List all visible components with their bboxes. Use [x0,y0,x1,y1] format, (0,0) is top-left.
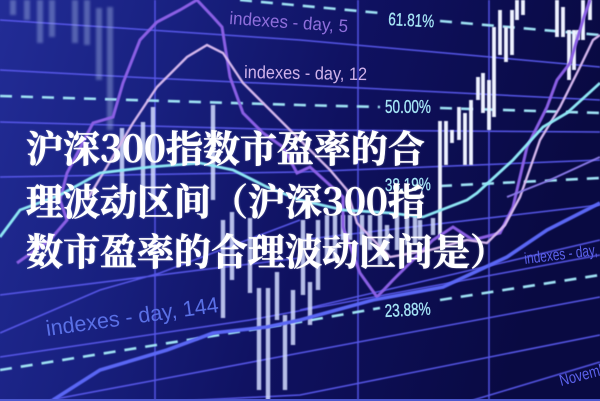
title line 1: 沪深300指数市盈率的合 [26,119,425,173]
moving average: day 12 [87,35,600,257]
moving average: cyan [0,83,600,237]
moving average: blue [53,157,600,400]
percent labels: 50.00% [385,97,431,117]
index labels: indexes - day, 12 [244,62,367,84]
index labels: indexes - day, 5 [229,8,349,36]
percent labels [384,9,435,321]
moving average: day 5 [17,0,590,297]
candlesticks, middle [122,105,433,400]
title line 2: 理波动区间（沪深300指 [26,172,425,226]
candlesticks, faded left [13,0,110,130]
index labels: indexes - day, 144 [44,292,220,341]
percent labels: 23.88% [384,299,431,321]
candlesticks, right [440,0,590,240]
percent labels: 61.81% [388,9,435,31]
percent labels: 38.19% [385,174,431,195]
title line 3: 数市盈率的合理波动区间是） [26,222,507,276]
